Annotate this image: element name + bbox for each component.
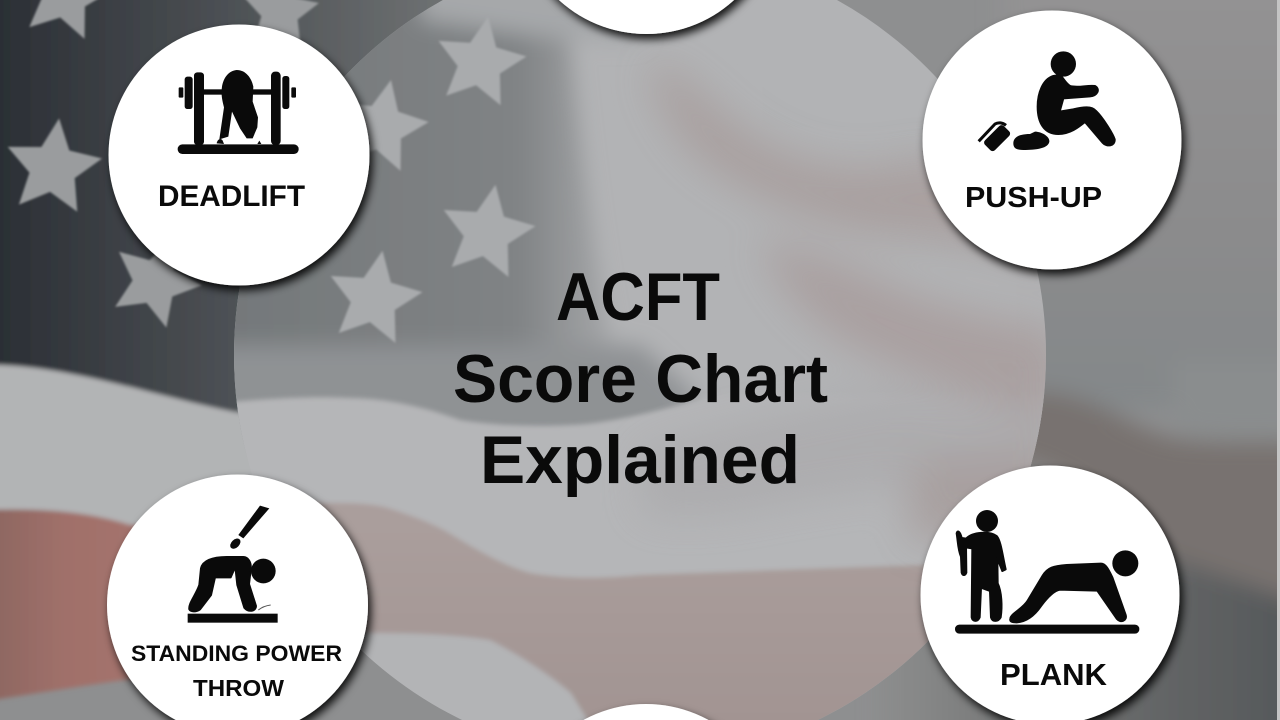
panel: plank [920, 466, 1180, 720]
panel: standing power throw [107, 474, 368, 720]
bottom exercise circle (cropped) [516, 704, 776, 720]
title: Score Chart [453, 341, 828, 417]
stars inside the disc [331, 20, 535, 342]
top exercise circle (cropped) [516, 0, 776, 34]
icon: standing figure and plank figure [955, 510, 1139, 634]
icon: deadlift barbell and figure [178, 70, 299, 154]
stars on the flag canton [1, 0, 321, 334]
label: push-up: PUSH-UP [965, 182, 1102, 214]
title: ACFT [556, 259, 720, 335]
label: plank: PLANK [1000, 657, 1108, 692]
panel: push-up [922, 10, 1182, 270]
icon: bent-over figure with ball throw [188, 506, 278, 623]
label: deadlift: DEADLIFT [158, 180, 305, 213]
title [453, 259, 828, 498]
panel: deadlift [108, 24, 370, 286]
translucent central disc [234, 0, 1046, 720]
label: standing power throw: STANDING POWER [131, 641, 342, 666]
panel: standing power throw: THROW [193, 675, 284, 701]
icon: seated figure with bag [979, 51, 1115, 152]
title: Explained [480, 422, 800, 498]
